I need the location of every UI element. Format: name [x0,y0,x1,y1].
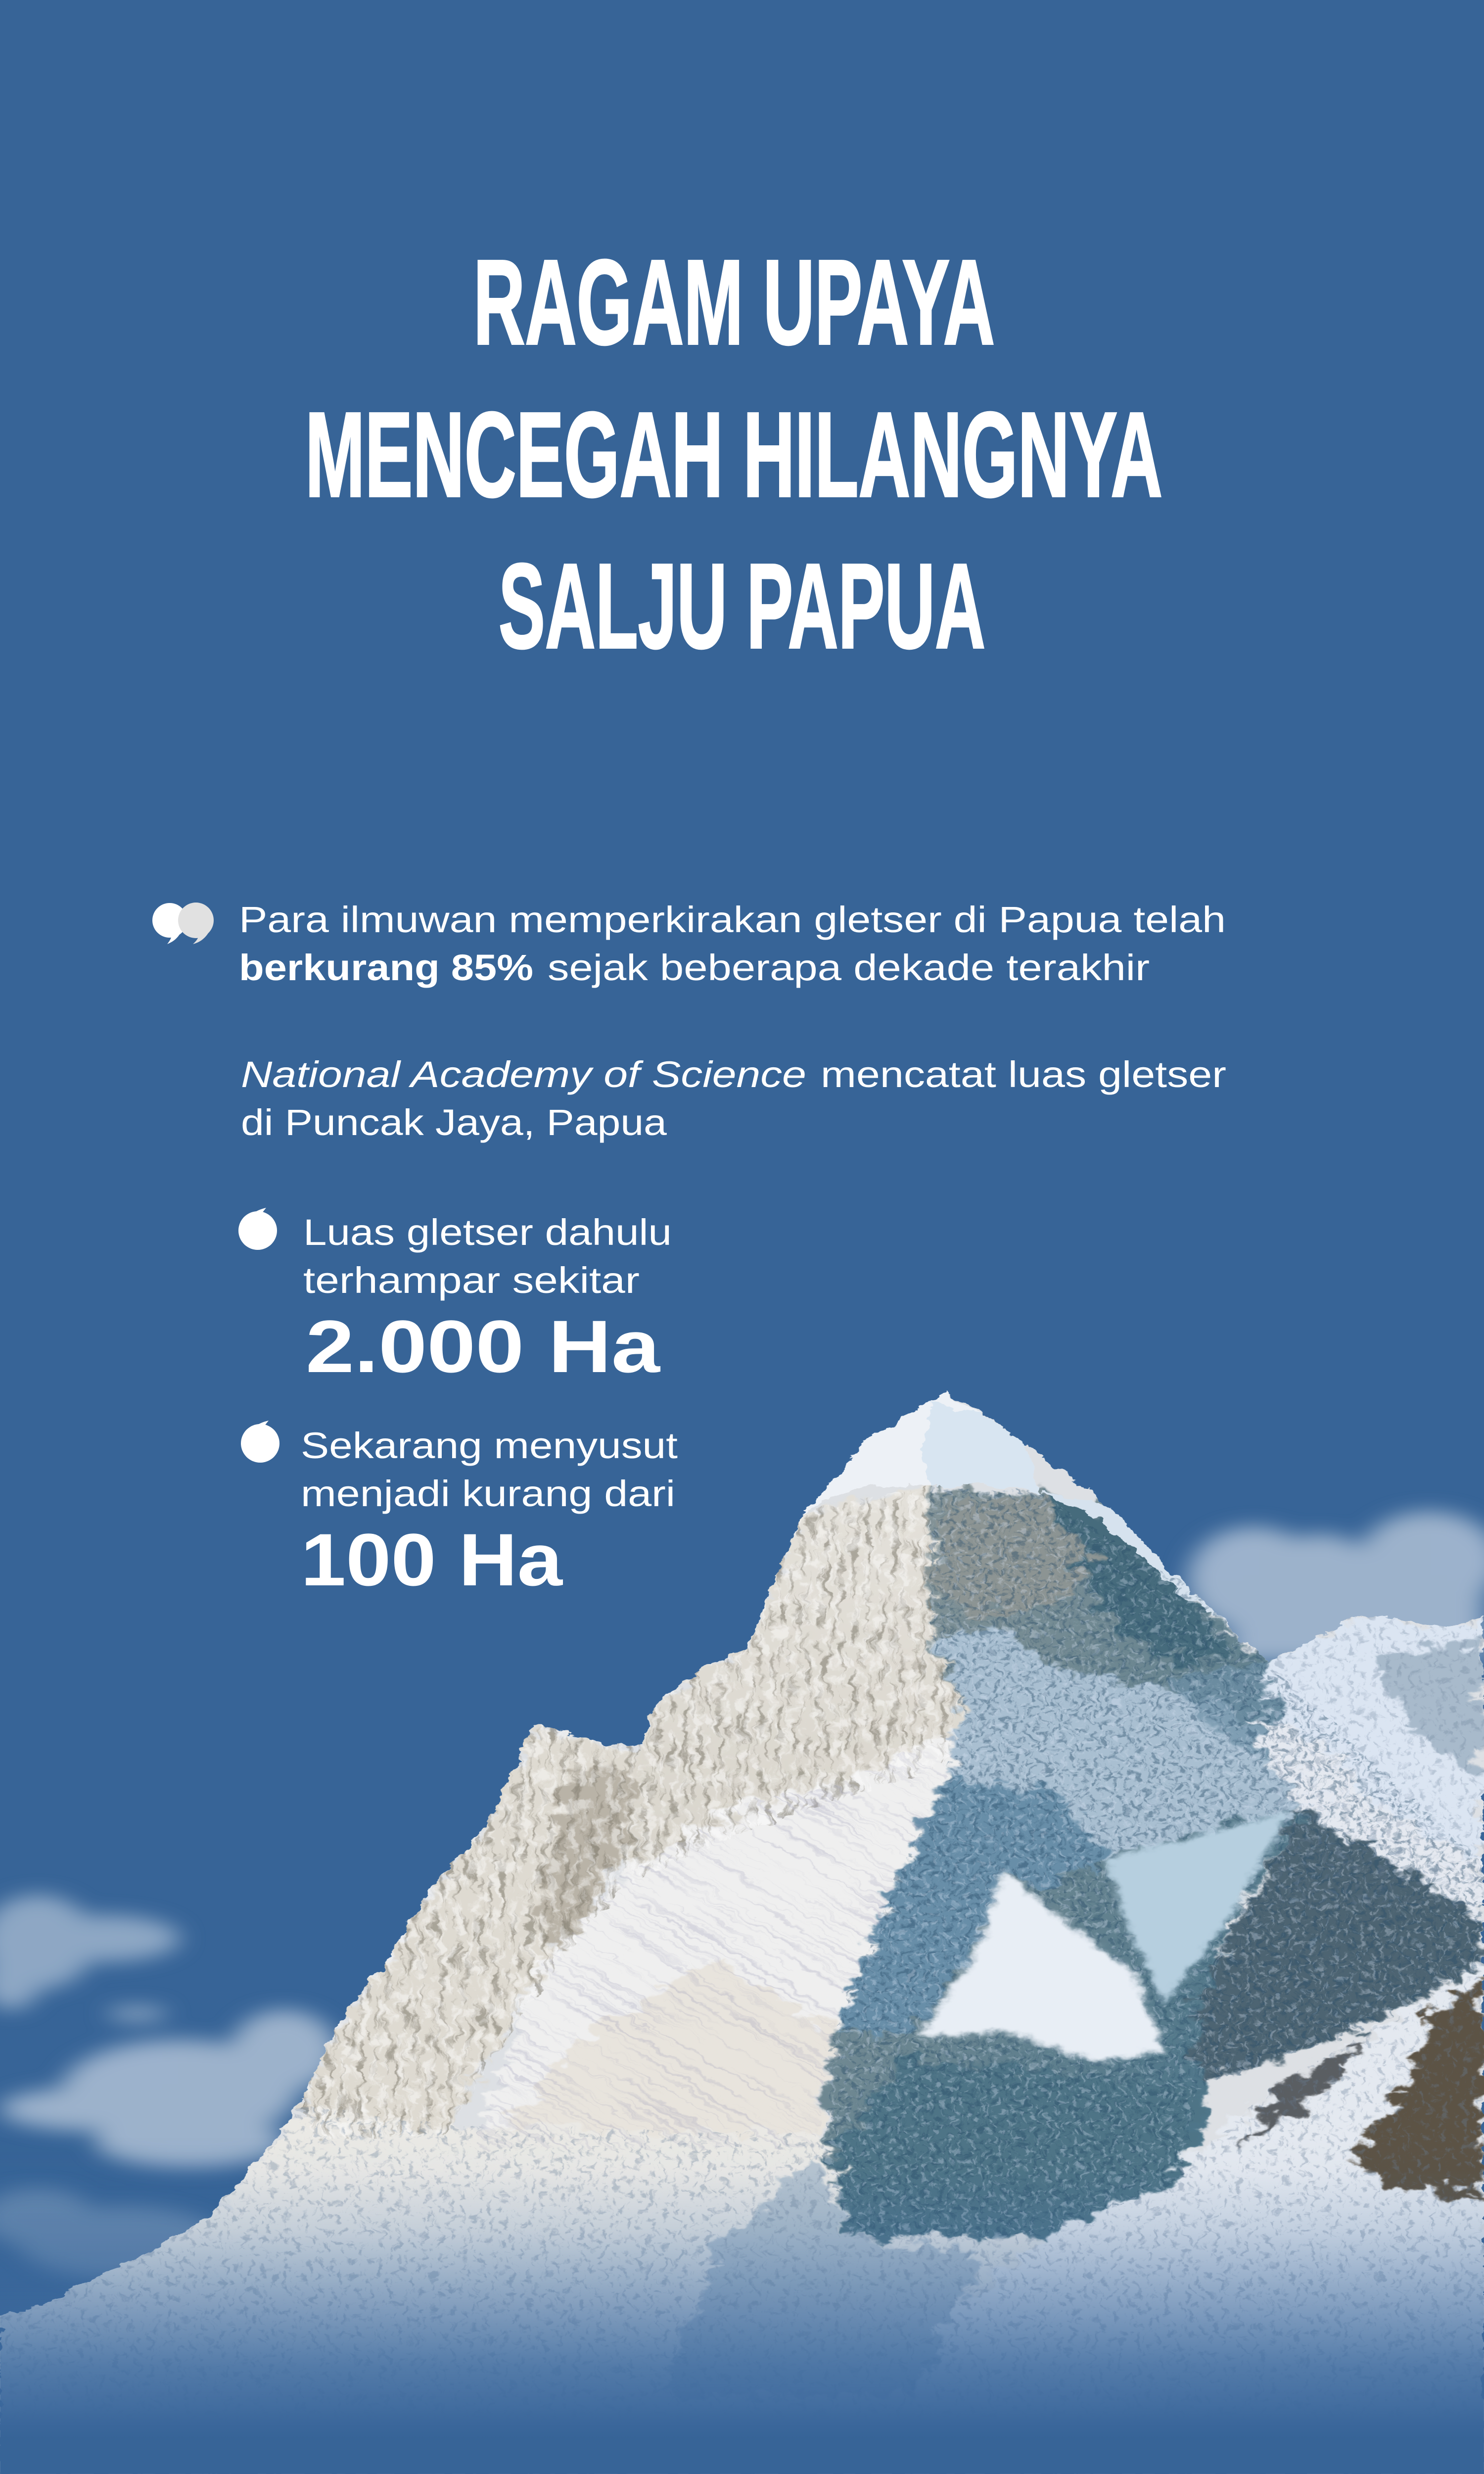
bold phrase: berkurang 85% [239,947,533,988]
snow triangle [918,1869,1164,2062]
paragraph: national academy of science [241,1054,1226,1143]
title line 1: RAGAM UPAYA [473,235,995,370]
text: Sekarang menyusut [301,1425,678,1466]
line 1: Para ilmuwan memperkirakan gletser di Papua telah [239,899,1226,940]
far right rock [1195,1811,1484,2084]
fade into background [0,2134,1484,2439]
stat: current glacier area [241,1421,678,1601]
cream lower slope [492,1960,833,2149]
icon: bullet [241,1421,279,1463]
text: terhampar sekitar [303,1260,640,1301]
rock texture on shaded faces [814,1481,1484,2243]
clouds behind mountain [0,1512,1484,2280]
right ridge snow [1039,1493,1268,1663]
title line 3: SALJU PAPUA [499,538,985,673]
lower snow texture [0,1953,1484,2474]
left buttress [303,1724,644,2141]
shaded right face [824,1486,1301,2236]
teal base rock [833,2062,1195,2236]
vertical streaks on lit rock [284,1481,975,2149]
italic source name: National Academy of Science [241,1054,806,1095]
lower snow slopes [0,2105,1041,2474]
foreground ridge [880,1964,1484,2474]
value: 2.000 Ha [306,1305,661,1388]
line 1 remainder: mencatat luas gletser [821,1054,1226,1095]
brown rock [1348,1981,1484,2196]
icon: quote bubbles [152,903,214,944]
central snow slope [473,1731,958,2149]
line 2 remainder: sejak beberapa dekade terakhir [548,947,1150,988]
lower center bluish snow [662,2156,984,2396]
title [305,235,1162,673]
snowy mid right face [833,1626,1295,2033]
lit rock face [625,1485,964,1888]
text: Luas gletser dahulu [303,1212,672,1253]
mountain faces with craggy borders [0,1485,1484,2474]
second peak texture [1273,1616,1484,1905]
snow cap [806,1392,1039,1512]
icon: bullet [238,1208,277,1250]
stat: former glacier area [238,1208,672,1388]
diagonal streaks on snow slope [0,987,1484,2474]
intro paragraph: glacier decline [239,899,1226,988]
text: menjadi kurang dari [301,1473,675,1514]
mountain body [0,1390,1484,2474]
hanging glacier [1108,1811,1289,2003]
value: 100 Ha [301,1518,563,1601]
right secondary peak [1268,1616,1484,1866]
illustration: snowy mountain with clouds [0,1390,1484,2474]
line 2: di Puncak Jaya, Papua [241,1102,667,1143]
